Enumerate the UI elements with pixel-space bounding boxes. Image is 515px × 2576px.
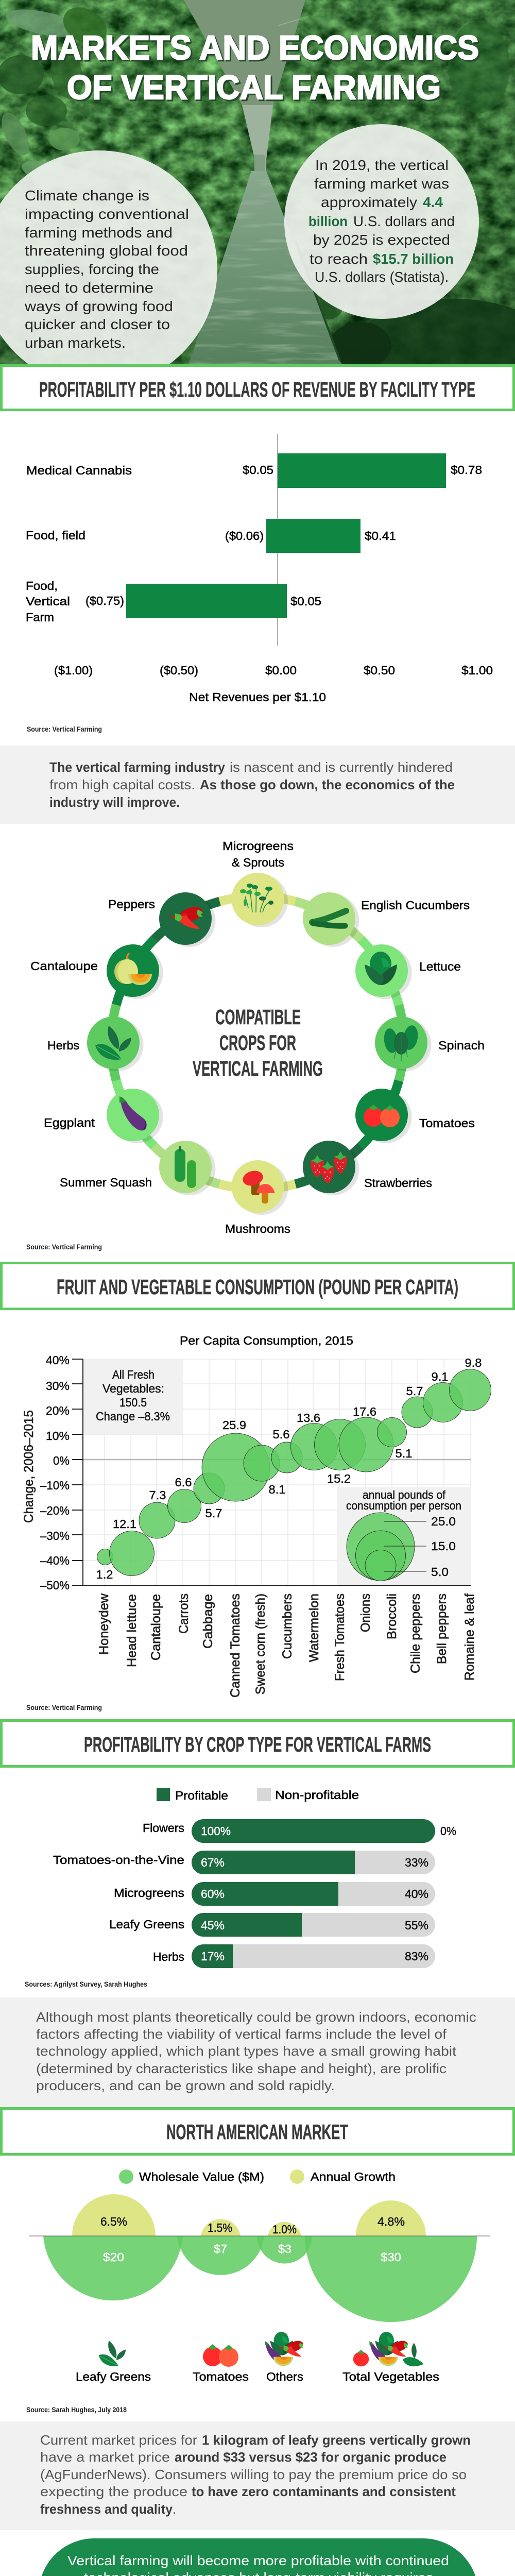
box: all fresh vegetables: All Fresh: [112, 1368, 154, 1381]
market category labels: [76, 2370, 439, 2383]
bar: food, vertical farm: Vertical: [26, 595, 70, 608]
bar: microgreens: [114, 1882, 435, 1906]
section heading: profitability by crop type: [1, 1721, 514, 1766]
bar: food, vertical farm: Food,: [26, 579, 58, 592]
legend: wholesale value and annual growth: Annual Growth: [311, 2170, 396, 2183]
bubble values: 25.9: [222, 1418, 246, 1432]
legend: annual pounds: 15.0: [431, 1539, 456, 1553]
wholesale value semicircles: [43, 2236, 477, 2322]
y axis labels: –50%: [40, 1579, 70, 1592]
source note: Source: Vertical Farming: [27, 725, 102, 733]
bar: leafy greens: 55%: [405, 1919, 428, 1932]
crop: spinach: [375, 1016, 432, 1071]
text block: economic factors: technology applied, which plant types have a small growing habit: [36, 2043, 457, 2059]
bar: herbs: 83%: [405, 1950, 428, 1963]
x axis labels: Honeydew: [97, 1593, 111, 1655]
section heading: north american market: NORTH AMERICAN MARKET: [166, 2120, 348, 2144]
callout: market size circle: 4.4: [423, 194, 443, 210]
text block: market prices: around $33 versus $23 for organic produce: [175, 2449, 447, 2465]
y axis labels: [22, 1353, 70, 1592]
bar: food, vertical farm: $0.05: [290, 595, 321, 608]
bar: medical cannabis: Medical Cannabis: [26, 464, 132, 477]
crop labels: & Sprouts: [232, 856, 284, 869]
legend: wholesale value and annual growth: Wholesale Value ($M): [139, 2170, 264, 2183]
wholesale values: $7: [214, 2242, 227, 2256]
callout: climate change circle: [0, 150, 217, 387]
crop labels: Spinach: [438, 1039, 485, 1052]
box: all fresh vegetables: [83, 1359, 183, 1434]
wholesale values: $20: [103, 2250, 124, 2264]
bar: medical cannabis: $0.78: [451, 463, 482, 477]
text block: market prices: to have zero contaminants and consistent: [192, 2484, 456, 2499]
x axis labels: Fresh Tomatoes: [333, 1594, 347, 1681]
hero photo background: greenhouse corridor: [0, 0, 515, 381]
x axis labels: $0.50: [364, 664, 395, 677]
bar: food, vertical farm: ($0.75): [85, 594, 124, 607]
callout: climate change circle: impacting conventional: [25, 206, 189, 222]
section heading: profitability per revenue: [1, 366, 514, 410]
bubble values: 8.1: [269, 1483, 285, 1496]
callout: climate change circle: farming methods and: [25, 225, 173, 241]
crop: english cucumbers: [303, 892, 359, 947]
crop labels: Mushrooms: [225, 1222, 290, 1235]
crop: microgreens: [232, 873, 288, 927]
crop labels: English Cucumbers: [361, 899, 470, 912]
text block: market prices: expecting the produce: [40, 2484, 187, 2499]
bubble values: 1.2: [96, 1568, 113, 1581]
y axis labels: –10%: [40, 1479, 70, 1492]
bar: tomatoes on the vine: 33%: [405, 1856, 428, 1869]
market category labels: Tomatoes: [193, 2370, 249, 2383]
bubble chart: per capita consumption: [22, 1353, 491, 1698]
text block: industry nascent: [0, 745, 515, 824]
callout: climate change circle: supplies, forcing the: [25, 261, 159, 277]
crop: mushrooms: [232, 1160, 288, 1215]
text block: industry nascent: industry will improve.: [49, 794, 180, 810]
callout: climate change circle: need to determine: [25, 280, 153, 296]
text block: industry nascent: As those go down, the economics of the: [200, 777, 455, 792]
text block: economic factors: (determined by characteristics like shape and height), are prolific: [36, 2061, 447, 2076]
bar: herbs: Herbs: [153, 1950, 184, 1963]
icon: total vegetables: [353, 2332, 424, 2366]
y axis labels: –40%: [40, 1554, 70, 1567]
market category labels: Others: [266, 2370, 303, 2383]
legend: annual pounds: 5.0: [431, 1565, 449, 1579]
bar chart: net revenue by facility type: [26, 434, 493, 704]
source note: Source: Vertical Farming: [26, 1703, 102, 1711]
bar: microgreens: 60%: [201, 1887, 225, 1901]
title: MARKETS AND ECONOMICS: [32, 30, 480, 68]
bubble values: 9.1: [432, 1370, 448, 1383]
text block: economic factors: producers, and can be grown and sold rapidly.: [36, 2078, 335, 2093]
bar: flowers: Flowers: [143, 1821, 184, 1835]
bubble values: 13.6: [297, 1411, 320, 1425]
wholesale values: $3: [278, 2242, 291, 2256]
bar: leafy greens: Leafy Greens: [109, 1918, 184, 1931]
crop: tomatoes: [355, 1089, 412, 1143]
text block: industry nascent: is nascent and is currently hindered: [230, 759, 453, 775]
x axis labels: Cabbage: [201, 1594, 215, 1649]
callout: market size circle: U.S. dollars and: [353, 213, 455, 229]
bar: food, field: [26, 519, 396, 553]
x axis labels: Watermelon: [307, 1594, 321, 1662]
bar: microgreens: Microgreens: [114, 1886, 184, 1900]
callout: market size circle: billion: [308, 213, 348, 229]
legend: profitable vs non-profitable: [157, 1788, 359, 1802]
crop labels: Lettuce: [419, 960, 461, 973]
text block: market prices: (AgFunderNews). Consumers willing to pay the premium price do so: [40, 2467, 467, 2482]
bar: flowers: 100%: [201, 1824, 231, 1838]
callout: climate change circle: ways of growing food: [24, 298, 173, 314]
callout: climate change circle: threatening global food: [25, 243, 188, 259]
title: MARKETS AND ECONOMICS: [31, 28, 479, 66]
axes: [72, 1359, 471, 1585]
y axis labels: –30%: [40, 1529, 70, 1543]
title: OF VERTICAL FARMING: [68, 70, 442, 108]
growth values: 6.5%: [100, 2215, 127, 2228]
x axis labels: $0.00: [265, 664, 297, 677]
bubble values: 15.2: [327, 1472, 351, 1485]
callout: market size circle: $15.7 billion: [373, 251, 454, 267]
y axis labels: Change, 2006–2015: [22, 1410, 36, 1523]
crop labels: Microgreens: [222, 839, 294, 853]
bar: medical cannabis: [26, 453, 482, 488]
crop labels: [30, 839, 485, 1235]
growth values: [100, 2215, 405, 2236]
bubble values: 5.7: [406, 1384, 423, 1398]
text block: market prices: 1 kilogram of leafy greens vertically grown: [202, 2432, 471, 2448]
bubble values: 17.6: [353, 1405, 376, 1418]
callout: market size circle: [284, 124, 479, 319]
title: [31, 28, 480, 108]
bar: microgreens: 40%: [405, 1887, 428, 1901]
bubble values: 12.1: [113, 1517, 136, 1531]
title: OF VERTICAL FARMING: [67, 68, 441, 106]
growth values: 1.0%: [272, 2223, 297, 2236]
box: all fresh vegetables: Change –8.3%: [96, 1410, 170, 1423]
callout: market size circle: by 2025 is expected: [313, 232, 450, 248]
ring center heading: COMPATIBLE: [215, 1005, 301, 1029]
icon: tomatoes: [203, 2344, 238, 2367]
stacked bars: profitability by crop: [53, 1819, 456, 1968]
x axis labels: Sweet corn (fresh): [253, 1594, 268, 1694]
ring center heading: [193, 1005, 323, 1080]
crop labels: Peppers: [108, 897, 155, 911]
x axis labels: Head lettuce: [125, 1594, 139, 1667]
bubbles: [97, 1369, 491, 1575]
legend: profitable vs non-profitable: Non-profitable: [275, 1788, 359, 1802]
x axis labels: ($1.00): [54, 664, 93, 677]
bubble values: 7.3: [149, 1488, 166, 1502]
y axis labels: 10%: [46, 1429, 70, 1443]
bubble values: [96, 1356, 482, 1581]
callout: market size circle: approximately: [321, 194, 417, 210]
bubble values: 5.7: [205, 1506, 222, 1520]
text block: market prices: Current market prices for: [40, 2432, 197, 2448]
legend: annual pounds: annual pounds of: [363, 1488, 446, 1501]
crop: herbs: [87, 1016, 143, 1071]
x axis labels: [97, 1593, 477, 1698]
y axis labels: 20%: [46, 1404, 70, 1417]
callout: climate change circle: quicker and closer to: [25, 316, 170, 332]
crop labels: Cantaloupe: [30, 959, 98, 973]
crop labels: Summer Squash: [60, 1176, 152, 1189]
growth values: 1.5%: [208, 2221, 232, 2234]
ring center heading: VERTICAL FARMING: [193, 1057, 323, 1080]
bubble values: 9.8: [465, 1356, 482, 1369]
crop: summer squash: [159, 1141, 215, 1195]
y axis labels: –20%: [40, 1504, 70, 1517]
legend: annual pounds: 25.0: [431, 1515, 456, 1528]
bar: food, field: $0.41: [365, 529, 396, 543]
legend: profitable vs non-profitable: Profitable: [175, 1789, 228, 1802]
chart title: Per Capita Consumption, 2015: [180, 1334, 353, 1347]
x axis labels: Onions: [358, 1594, 373, 1632]
y axis labels: 40%: [46, 1353, 70, 1367]
text block: market prices: [0, 2421, 515, 2530]
ring arcs: [111, 896, 404, 1189]
x axis labels: ($0.50): [160, 664, 198, 677]
text block: industry nascent: The vertical farming industry: [49, 759, 226, 775]
x axis labels: Cantaloupe: [149, 1594, 163, 1660]
bar: tomatoes on the vine: [53, 1851, 435, 1874]
source note: Source: Sarah Hughes, July 2018: [26, 2405, 127, 2414]
callout: market size circle: farming market was: [314, 176, 449, 192]
bar: medical cannabis: $0.05: [243, 463, 273, 477]
x axis labels: Bell peppers: [435, 1594, 449, 1664]
legend: annual pounds: consumption per person: [346, 1499, 461, 1512]
bar: flowers: [143, 1819, 456, 1843]
bar: tomatoes on the vine: 67%: [201, 1856, 225, 1869]
crop labels: Herbs: [47, 1039, 79, 1052]
text block: market prices: freshness and quality: [40, 2501, 173, 2517]
bar: food, vertical farm: Farm: [26, 611, 54, 624]
crop labels: Eggplant: [44, 1116, 95, 1129]
bar: food, vertical farm: [26, 579, 321, 624]
callout: conclusion: [39, 2538, 478, 2576]
text block: economic factors: factors affecting the viability of vertical farms include the level of: [36, 2026, 447, 2042]
crop labels: Strawberries: [364, 1176, 432, 1190]
icon: others vegetables: [265, 2332, 305, 2366]
ring center heading: CROPS FOR: [219, 1031, 296, 1055]
text block: market prices: have a market price: [40, 2449, 170, 2465]
callout: market size circle: U.S. dollars (Statista).: [315, 269, 449, 285]
callout: market size circle: In 2019, the vertical: [315, 157, 449, 173]
crop: cantaloupe: [107, 944, 163, 999]
legend: annual pounds: [337, 1487, 471, 1585]
wholesale values: $30: [381, 2250, 401, 2264]
callout: conclusion: Vertical farming will become more profitable with continued: [67, 2553, 449, 2568]
x axis labels: Carrots: [177, 1594, 191, 1634]
legend: wholesale value and annual growth: [119, 2170, 396, 2184]
bubble values: 6.6: [175, 1476, 192, 1489]
bar: food, field: ($0.06): [225, 529, 264, 543]
crop: peppers: [159, 892, 215, 947]
x axis labels: $1.00: [461, 664, 493, 677]
section heading: north american market: [1, 2108, 514, 2155]
text block: economic factors: Although most plants theoretically could be grown indoors, economic: [36, 2009, 476, 2025]
crop labels: Tomatoes: [419, 1116, 475, 1130]
x axis labels: Cucumbers: [280, 1594, 295, 1659]
growth values: 4.8%: [377, 2215, 405, 2228]
crop: lettuce: [355, 944, 412, 999]
x axis labels: Canned Tomatoes: [228, 1594, 243, 1698]
x axis labels: [54, 664, 493, 704]
bar: tomatoes on the vine: Tomatoes-on-the-Vine: [53, 1853, 184, 1867]
x axis labels: Broccoli: [385, 1594, 399, 1639]
box: all fresh vegetables: Vegetables:: [102, 1382, 164, 1395]
market category labels: Leafy Greens: [76, 2370, 151, 2383]
text block: market prices: .: [173, 2501, 176, 2517]
crop: eggplant: [107, 1089, 163, 1143]
x axis labels: Chile peppers: [408, 1594, 423, 1673]
source note: Source: Vertical Farming: [26, 1243, 102, 1251]
bubble values: 5.1: [396, 1447, 412, 1460]
bar: flowers: 0%: [440, 1824, 456, 1838]
text block: economic factors: [0, 1997, 515, 2107]
callout: climate change circle: Climate change is: [25, 188, 149, 204]
y axis labels: 0%: [53, 1454, 70, 1467]
panel: compatible crops ring: [30, 839, 485, 1235]
bar: leafy greens: 45%: [201, 1919, 225, 1932]
semicircle chart: north american market: [29, 2194, 490, 2322]
text block: industry nascent: from high capital costs.: [49, 777, 195, 792]
bar: food, field: Food, field: [26, 529, 85, 542]
icon: leafy greens: [99, 2341, 126, 2366]
x axis labels: Net Revenues per $1.10: [189, 690, 326, 704]
box: all fresh vegetables: 150.5: [119, 1396, 147, 1409]
bar: herbs: 17%: [201, 1950, 225, 1963]
wholesale values: [103, 2242, 401, 2264]
bubble values: 5.6: [273, 1428, 289, 1441]
bar: herbs: [153, 1944, 435, 1968]
callout: market size circle: to reach: [310, 251, 368, 267]
bar: leafy greens: [109, 1913, 435, 1937]
x axis labels: Romaine & leaf: [462, 1594, 477, 1681]
section heading: fruit and vegetable consumption: [1, 1263, 514, 1309]
crop: strawberries: [303, 1141, 359, 1195]
annual growth semicircles: [72, 2194, 426, 2236]
callout: climate change circle: urban markets.: [25, 335, 126, 351]
market category labels: Total Vegetables: [342, 2370, 439, 2383]
y axis labels: 30%: [46, 1379, 70, 1393]
source note: Sources: Agrilyst Survey, Sarah Hughes: [25, 1980, 147, 1988]
